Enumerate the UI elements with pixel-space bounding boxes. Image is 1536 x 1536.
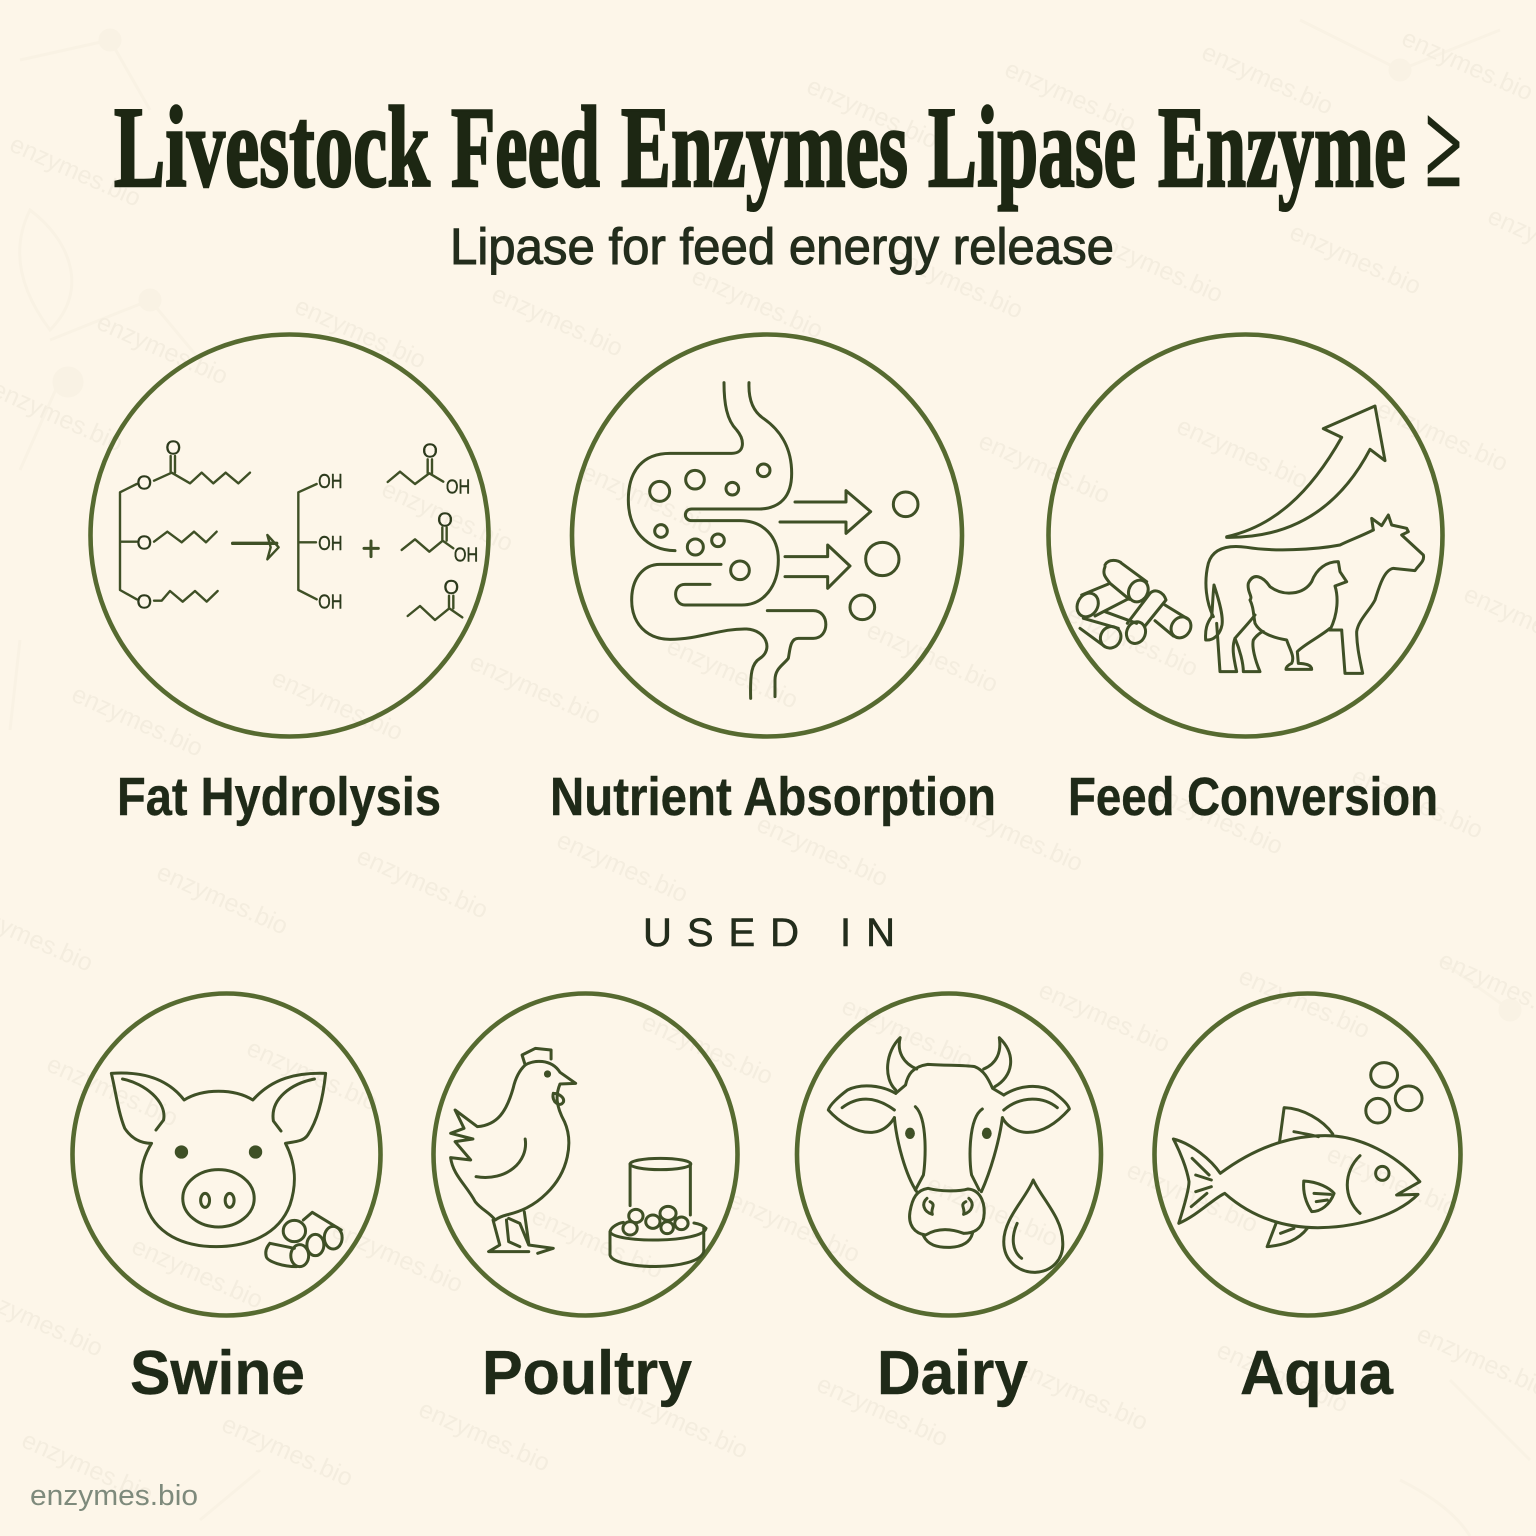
watermark pattern: enzymes.bio xyxy=(553,826,692,909)
watermark pattern: enzymes.bio xyxy=(1323,1140,1462,1223)
label: aqua: Aqua xyxy=(1240,1339,1394,1408)
icon: triglyceride hydrolysis reaction: O xyxy=(137,592,152,614)
panel: fat hydrolysis xyxy=(90,334,488,736)
panel: swine xyxy=(72,994,380,1316)
watermark pattern: enzymes.bio xyxy=(753,810,892,893)
watermark pattern: enzymes.bio xyxy=(68,680,207,763)
watermark pattern: enzymes.bio xyxy=(1213,1336,1352,1419)
watermark pattern: enzymes.bio xyxy=(1001,55,1140,138)
title: ≥ xyxy=(1425,84,1462,212)
title xyxy=(114,84,1462,212)
watermark pattern: enzymes.bio xyxy=(528,1202,667,1285)
label: feed conversion: Feed Conversion xyxy=(1068,767,1438,827)
watermark pattern: enzymes.bio xyxy=(6,130,145,213)
icon: triglyceride hydrolysis reaction: OH xyxy=(454,545,478,567)
heading: used in: USED IN xyxy=(643,911,895,955)
watermark pattern: enzymes.bio xyxy=(688,262,827,345)
watermark pattern: enzymes.bio xyxy=(153,858,292,941)
panel: aqua xyxy=(1154,994,1460,1316)
title: Lipase xyxy=(928,84,1136,212)
watermark pattern: enzymes.bio xyxy=(725,1186,864,1269)
title: Livestock xyxy=(114,84,430,212)
watermark pattern: enzymes.bio xyxy=(268,664,407,747)
icon: triglyceride hydrolysis reaction: O xyxy=(137,473,152,495)
watermark pattern: enzymes.bio xyxy=(1173,412,1312,495)
icon: cow head with milk drop xyxy=(828,1038,1069,1272)
footer brand: enzymes.bio xyxy=(30,1480,198,1512)
watermark pattern: enzymes.bio xyxy=(128,1232,267,1315)
icon: triglyceride hydrolysis reaction: O xyxy=(137,532,152,554)
watermark pattern: enzymes.bio xyxy=(93,308,232,391)
watermark pattern: enzymes.bio xyxy=(1286,218,1425,301)
watermark pattern: enzymes.bio xyxy=(243,1034,382,1117)
watermark pattern: enzymes.bio xyxy=(488,280,627,363)
watermark pattern: enzymes.bio xyxy=(466,648,605,731)
watermark pattern: enzymes.bio xyxy=(948,795,1087,878)
title: Feed xyxy=(451,84,600,212)
watermark pattern: enzymes.bio xyxy=(1035,976,1174,1059)
watermark pattern: enzymes.bio xyxy=(378,475,517,558)
panel: dairy xyxy=(797,994,1101,1316)
icon: fish with bubbles xyxy=(1173,1063,1422,1247)
watermark pattern: enzymes.bio xyxy=(613,1382,752,1465)
watermark pattern: enzymes.bio xyxy=(1348,762,1487,845)
watermark pattern: enzymes.bio xyxy=(291,292,430,375)
label: swine: Swine xyxy=(130,1339,305,1408)
icon: pellets, animals and growth arrow xyxy=(1073,406,1424,673)
watermark pattern: enzymes.bio xyxy=(923,1170,1062,1253)
watermark pattern: enzymes.bio xyxy=(353,842,492,925)
watermark pattern: enzymes.bio xyxy=(328,1216,467,1299)
panel: poultry xyxy=(434,994,738,1316)
label: poultry: Poultry xyxy=(482,1339,692,1408)
label: nutrient absorption: Nutrient Absorption xyxy=(550,767,996,827)
watermark pattern: enzymes.bio xyxy=(1148,778,1287,861)
watermark pattern: enzymes.bio xyxy=(663,632,802,715)
circle xyxy=(572,334,962,736)
watermark pattern: enzymes.bio xyxy=(1398,24,1536,107)
watermark pattern: enzymes.bio xyxy=(578,458,717,541)
icon: triglyceride hydrolysis reaction: O xyxy=(166,437,181,459)
icon: intestine with absorption arrows xyxy=(628,383,918,698)
watermark pattern: enzymes.bio xyxy=(803,72,942,155)
watermark pattern: enzymes.bio xyxy=(888,242,1027,325)
watermark pattern: enzymes.bio xyxy=(1123,1156,1262,1239)
label: dairy: Dairy xyxy=(877,1339,1029,1408)
icon: pig head with pellets xyxy=(111,1073,342,1267)
watermark pattern: enzymes.bio xyxy=(415,1395,554,1478)
watermark pattern: enzymes.bio xyxy=(1088,226,1227,309)
icon: triglyceride hydrolysis reaction: OH xyxy=(318,533,342,555)
watermark pattern: enzymes.bio xyxy=(638,1008,777,1091)
icon: chicken and feeder xyxy=(451,1048,706,1266)
circle xyxy=(90,334,488,736)
circle xyxy=(1048,334,1442,736)
icon: triglyceride hydrolysis reaction: OH xyxy=(446,476,470,498)
circle xyxy=(434,994,738,1316)
watermark pattern: enzymes.bio xyxy=(1235,962,1374,1045)
panel: feed conversion xyxy=(1048,334,1442,736)
icon: triglyceride hydrolysis reaction xyxy=(120,437,478,620)
watermark pattern: enzymes.bio xyxy=(218,1410,357,1493)
icon: triglyceride hydrolysis reaction: O xyxy=(444,577,459,599)
watermark pattern: enzymes.bio xyxy=(1063,600,1202,683)
title: Enzymes xyxy=(621,84,908,212)
circle xyxy=(797,994,1101,1316)
label: fat hydrolysis: Fat Hydrolysis xyxy=(117,767,441,827)
icon: triglyceride hydrolysis reaction: O xyxy=(422,441,438,463)
watermark pattern: enzymes.bio xyxy=(975,427,1114,510)
icon: triglyceride hydrolysis reaction: OH xyxy=(318,591,342,613)
panel: nutrient absorption xyxy=(572,334,962,736)
watermark pattern: enzymes.bio xyxy=(18,1426,157,1509)
icon: triglyceride hydrolysis reaction: OH xyxy=(318,471,342,493)
icon: triglyceride hydrolysis reaction: O xyxy=(437,509,453,531)
watermark pattern: enzymes.bio xyxy=(43,1050,182,1133)
circle xyxy=(1154,994,1460,1316)
watermark pattern: enzymes.bio xyxy=(1198,38,1337,121)
watermark pattern: enzymes.bio xyxy=(863,616,1002,699)
watermark pattern: enzymes.bio xyxy=(838,992,977,1075)
watermark pattern: enzymes.bio xyxy=(813,1370,952,1453)
watermark pattern: enzymes.bio xyxy=(1013,1354,1152,1437)
watermark pattern: enzymes.bio xyxy=(1373,395,1512,478)
circle xyxy=(72,994,380,1316)
subtitle: Lipase for feed energy release xyxy=(450,218,1114,275)
